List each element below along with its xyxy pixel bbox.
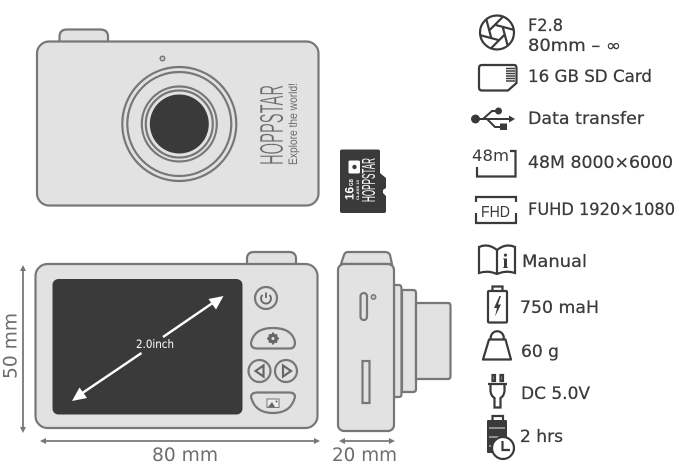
video resolution text: FUHD 1920×1080	[528, 200, 675, 219]
photo resolution text: 48M 8000×6000	[528, 153, 673, 172]
charging time text: 2 hrs	[520, 427, 563, 446]
height dimension	[0, 265, 26, 433]
top button, side	[341, 252, 392, 264]
back camera view	[36, 252, 318, 428]
width dimension 80 mm	[40, 438, 320, 466]
micro SD card	[340, 150, 386, 213]
icon: aperture	[479, 16, 515, 50]
micro SD card: HOPPSTAR	[359, 158, 379, 202]
screen size label: 2.0inch	[136, 337, 174, 351]
spec: manual	[479, 246, 587, 274]
icon: weight	[483, 331, 511, 360]
spec: SD card	[479, 65, 652, 90]
icon: battery with clock	[487, 416, 514, 459]
camera mini icon	[348, 160, 360, 174]
spec: aperture: 80mm – ∞	[528, 36, 621, 55]
indicator dot	[160, 56, 165, 61]
spec: power	[488, 375, 591, 408]
depth dimension 20 mm	[332, 438, 397, 466]
settings button	[251, 328, 295, 348]
shutter button, back	[247, 252, 296, 265]
icon: USB	[471, 108, 515, 130]
camera body, front	[37, 42, 318, 206]
label: 50 mm: 50 mm	[0, 313, 22, 379]
weight text: 60 g	[521, 342, 559, 361]
spec: weight	[483, 331, 559, 361]
icon: SD card	[479, 65, 516, 90]
camera body, side	[338, 264, 394, 431]
lens barrel segments	[394, 285, 450, 397]
manual text: Manual	[522, 252, 587, 271]
side camera view	[338, 252, 450, 431]
spec: aperture	[479, 16, 621, 55]
left button	[248, 360, 270, 382]
spec: video resolution	[476, 197, 675, 223]
lens	[122, 67, 236, 181]
icon: 48m frame	[472, 146, 516, 176]
data transfer text: Data transfer	[528, 109, 644, 128]
card class: CLASS 10	[355, 179, 360, 200]
label: 20 mm: 20 mm	[332, 445, 397, 466]
screen diagonal arrow	[72, 296, 224, 401]
SD card text: 16 GB SD Card	[528, 67, 652, 86]
front camera view	[37, 30, 318, 206]
tagline: Explore the world!	[286, 83, 300, 165]
card slot	[362, 361, 370, 403]
power text: DC 5.0V	[521, 384, 591, 403]
screen	[52, 279, 242, 414]
aperture text: F2.8	[528, 16, 563, 35]
power button	[255, 287, 277, 309]
right button	[275, 360, 297, 382]
icon: plug	[488, 375, 507, 408]
icon: 48m frame: 48m	[472, 146, 509, 165]
spec: battery	[488, 286, 599, 322]
side switch	[360, 293, 367, 320]
icon: FHD frame: FHD	[481, 204, 510, 221]
icon: battery	[488, 286, 507, 322]
card capacity unit: GB	[349, 179, 355, 186]
label: 80 mm: 80 mm	[152, 445, 218, 466]
shutter button, front	[60, 30, 108, 42]
spec: data transfer	[471, 108, 644, 130]
icon: FHD frame	[476, 197, 516, 223]
gallery button	[251, 392, 295, 413]
battery text: 750 maH	[520, 298, 599, 317]
camera body, back	[36, 264, 318, 428]
icon: manual book: i	[502, 249, 508, 273]
card capacity: 16	[342, 187, 356, 200]
spec: photo resolution	[472, 146, 673, 176]
side dot	[371, 295, 376, 299]
spec: charging time	[487, 416, 563, 459]
